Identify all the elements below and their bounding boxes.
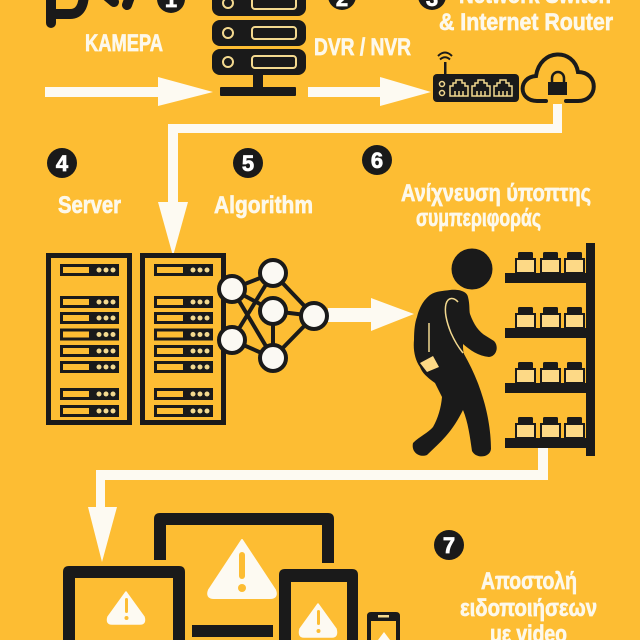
icon: tablet: [279, 569, 358, 640]
arrow: camera to recorder: [45, 77, 213, 106]
icon: shelves with products: [505, 243, 595, 456]
label: network switch and router: & Internet Router: [439, 9, 613, 36]
badge 1: [157, 0, 185, 13]
label: server: Server: [58, 192, 121, 219]
alert mark: monitor: [238, 552, 246, 592]
badge 5: [233, 148, 263, 178]
icon: desktop monitor: [154, 513, 334, 637]
label: camera: KAMEPA: [85, 30, 163, 57]
icon: camera: [51, 0, 131, 23]
arrow: behaviour to devices: [88, 448, 548, 562]
icon: router: [433, 52, 519, 102]
icon: server rack right: [142, 256, 224, 422]
badge 7: 7: [443, 533, 455, 558]
icon: neural network: [219, 260, 327, 371]
badge 2: [328, 0, 356, 11]
icon: cloud with padlock: [523, 54, 594, 101]
badge 7: [434, 530, 464, 560]
label: suspicious behaviour detection: Ανίχνευση ύποπτης: [401, 180, 591, 207]
badge 6: 6: [371, 148, 383, 173]
badge 4: [47, 148, 77, 178]
badge 6: [362, 145, 392, 175]
icon: server rack left: [48, 256, 130, 422]
icon: walking person: [413, 248, 497, 456]
label: suspicious behaviour detection: [401, 180, 591, 232]
label: DVR / NVR: DVR / NVR: [314, 34, 411, 61]
badge 5: 5: [242, 151, 254, 176]
alert triangle: monitor: [208, 540, 276, 598]
arrow: algorithm to behaviour: [328, 298, 414, 331]
label: network switch and router: [439, 0, 613, 36]
label: suspicious behaviour detection: συμπεριφοράς: [416, 205, 541, 232]
label: send video alerts: ειδοποιήσεων: [460, 595, 597, 622]
icon: phone: [367, 612, 400, 640]
label: algorithm: Algorithm: [214, 192, 313, 219]
badge 4: 4: [56, 151, 69, 176]
label: send video alerts: [460, 568, 597, 640]
arrow: router to server: [158, 104, 562, 256]
arrow: recorder to router: [308, 77, 431, 106]
label: send video alerts: Αποστολή: [481, 568, 577, 595]
icon: DVR server: [212, 0, 306, 96]
icon: laptop: [63, 566, 185, 640]
badge 3: [418, 0, 446, 11]
